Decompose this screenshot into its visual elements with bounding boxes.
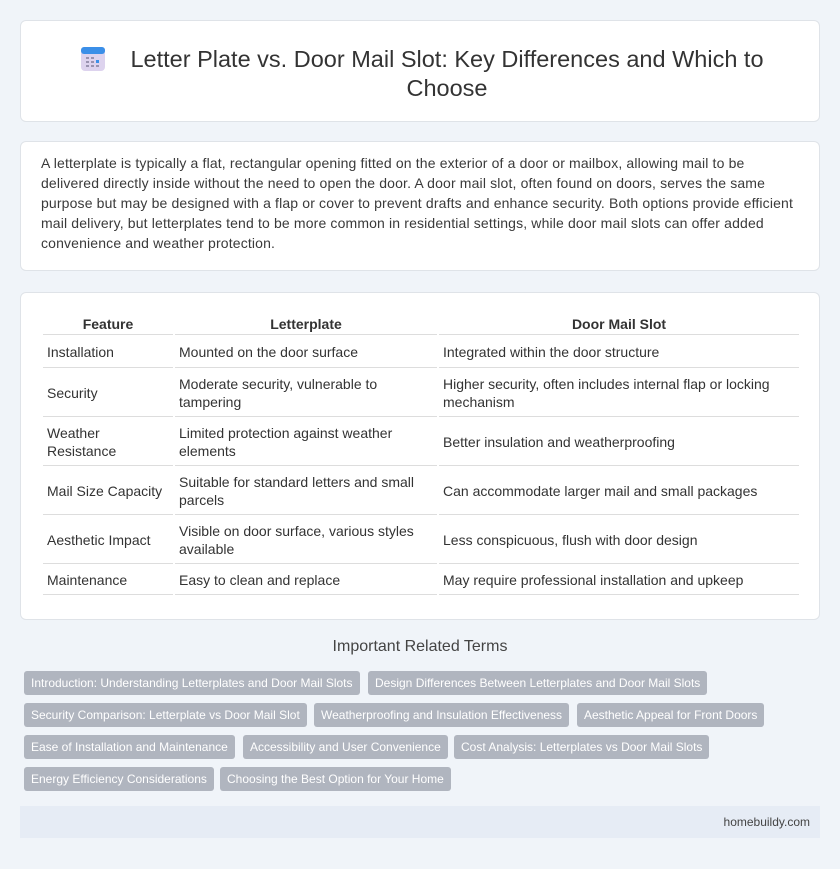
- text: Accessibility and User Convenience: [250, 740, 441, 754]
- comparison table: Can accommodate larger mail and small packages: [443, 483, 757, 499]
- comparison table: Visible on door surface, various styles available: [179, 523, 414, 557]
- comparison table: May require professional installation and upkeep: [443, 572, 743, 588]
- comparison table: Higher security, often includes internal flap or locking mechanism: [443, 376, 770, 410]
- tags: [24, 671, 764, 791]
- text: Aesthetic Appeal for Front Doors: [584, 708, 757, 722]
- comparison table: Door Mail Slot: [572, 316, 666, 332]
- footer: [20, 806, 820, 838]
- text: Cost Analysis: Letterplates vs Door Mail Slots: [461, 740, 702, 754]
- text: Weatherproofing and Insulation Effectiveness: [321, 708, 562, 722]
- comparison table: [20, 292, 820, 620]
- comparison table: Maintenance: [47, 572, 127, 588]
- comparison table: Security: [47, 385, 98, 401]
- text: Energy Efficiency Considerations: [31, 772, 207, 786]
- comparison table: Aesthetic Impact: [47, 532, 150, 548]
- text: Security Comparison: Letterplate vs Door Mail Slot: [31, 708, 300, 722]
- comparison table: Easy to clean and replace: [179, 572, 340, 588]
- text: Ease of Installation and Maintenance: [31, 740, 228, 754]
- comparison table: Integrated within the door structure: [443, 344, 659, 360]
- comparison table: Feature: [83, 316, 133, 332]
- related terms heading: Important Related Terms: [333, 638, 507, 655]
- comparison table: Less conspicuous, flush with door design: [443, 532, 697, 548]
- comparison table: Limited protection against weather elements: [179, 425, 392, 459]
- text: Design Differences Between Letterplates and Door Mail Slots: [375, 676, 700, 690]
- comparison table: Installation: [47, 344, 114, 360]
- comparison table: Suitable for standard letters and small parcels: [179, 474, 414, 508]
- comparison table: Mail Size Capacity: [47, 483, 162, 499]
- comparison table: Moderate security, vulnerable to tampering: [179, 376, 377, 410]
- comparison table: Better insulation and weatherproofing: [443, 434, 675, 450]
- intro text: [20, 141, 820, 271]
- title: Letter Plate vs. Door Mail Slot: Key Differences and Which to Choose: [130, 46, 764, 101]
- comparison table: Mounted on the door surface: [179, 344, 358, 360]
- text: Choosing the Best Option for Your Home: [227, 772, 444, 786]
- footer: homebuildy.com: [724, 815, 810, 829]
- text: Introduction: Understanding Letterplates and Door Mail Slots: [31, 676, 353, 690]
- intro text: A letterplate is typically a flat, rectangular opening fitted on the exterior of a door or mailbox, allowing mail to be delivered directly inside without the need to open the door. A door mail slot, often found on doors, serves the same purpose but may be designed with a flap or cover to prevent drafts and enhance security. Both options provide efficient mail delivery, but letterplates tend to be more common in residential settings, while door mail slots can offer added convenience and weather protection.: [41, 155, 793, 251]
- comparison table: Weather Resistance: [47, 425, 116, 459]
- header card: [20, 20, 820, 122]
- icon: calendar: [81, 47, 105, 71]
- comparison table: Letterplate: [270, 316, 342, 332]
